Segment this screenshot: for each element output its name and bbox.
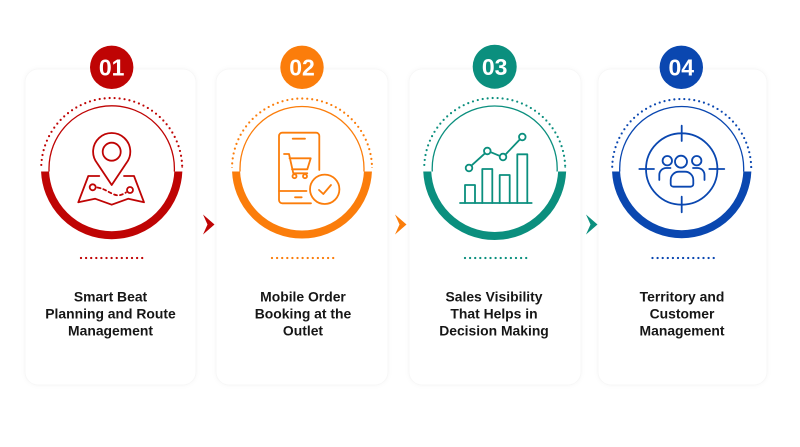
badge 04: 04 <box>669 54 694 80</box>
arrow: step 3 to 4 <box>586 214 598 234</box>
arrow: step 2 to 3 <box>395 214 406 234</box>
label 1: Smart Beat <box>74 288 148 304</box>
icon: map pin on map <box>78 133 144 205</box>
card 2 background <box>216 69 388 385</box>
divider 1 <box>81 257 143 259</box>
arrow: step 1 to 2 <box>203 214 214 234</box>
badge 04 <box>660 46 703 89</box>
card 4 background <box>598 69 767 385</box>
divider 2 <box>272 257 334 259</box>
label 4: Territory and <box>640 288 724 304</box>
badge 03 <box>473 45 517 89</box>
ring 4 <box>612 99 751 238</box>
badge 03: 03 <box>482 54 507 80</box>
icon: phone with cart <box>279 133 339 204</box>
ring 2 <box>232 98 372 238</box>
label 2: Booking at the <box>255 306 352 322</box>
label 3: That Helps in <box>450 306 538 322</box>
label 4: Management <box>640 322 725 338</box>
label 1: Planning and Route <box>45 306 176 322</box>
badge 02 <box>280 46 324 89</box>
badge 02: 02 <box>289 54 315 80</box>
card 3 background <box>409 69 581 385</box>
panel: step 4 <box>611 46 752 338</box>
panel: step 1 <box>40 46 184 338</box>
label 2: Mobile Order <box>260 288 346 304</box>
divider 3 <box>465 257 527 259</box>
label 3: Decision Making <box>439 322 549 338</box>
panel: step 3 <box>423 44 566 338</box>
label 1: Management <box>68 322 153 338</box>
badge 01: 01 <box>99 54 125 80</box>
icon: target with people <box>639 126 724 212</box>
icon: bar and line chart <box>460 134 532 203</box>
divider 4 <box>652 257 714 259</box>
ring 3 <box>424 98 565 239</box>
panel: step 2 <box>231 46 373 336</box>
ring 1 <box>41 98 182 239</box>
badge 01 <box>90 46 133 89</box>
card 1 background <box>25 69 196 385</box>
label 2: Outlet <box>283 322 323 338</box>
label 3: Sales Visibility <box>445 288 543 304</box>
label 4: Customer <box>650 306 715 322</box>
